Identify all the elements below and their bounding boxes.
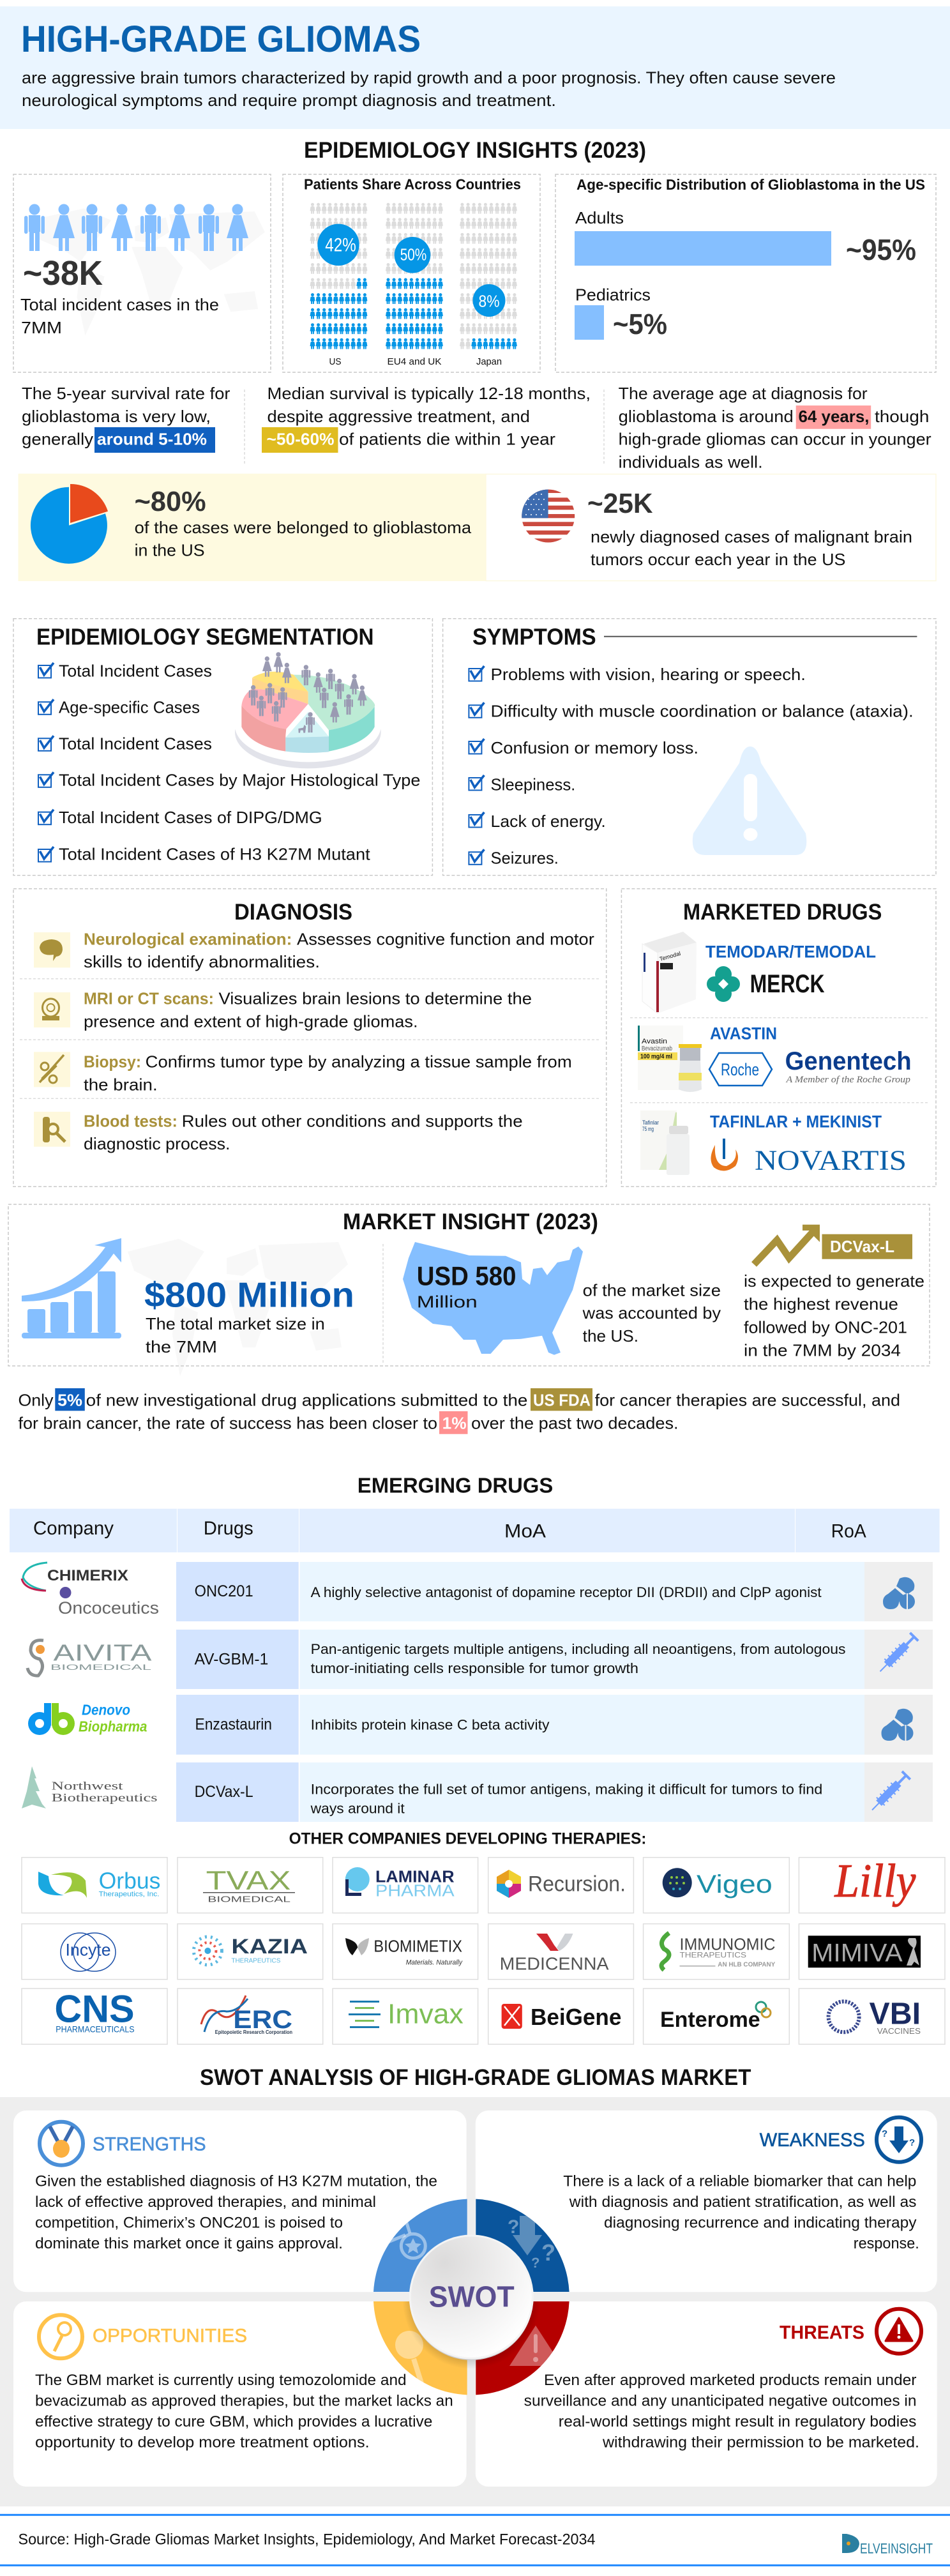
panel heading: Age-specific Distribution of Glioblastoma in the US: [577, 176, 925, 193]
pictogram: Japan: 8%: [479, 291, 499, 310]
logo: Orbus: Orbus: [99, 1867, 160, 1893]
table header: [10, 1509, 940, 1552]
logo: Aivita: [27, 1640, 152, 1676]
drug: Tafinlar + Mekinist: TAFINLAR + MEKINIST: [710, 1112, 882, 1132]
panel heading: EPIDEMIOLOGY SEGMENTATION: [36, 623, 374, 649]
checklist: symptoms: Lack of energy.: [490, 812, 606, 831]
logo: Kazia: [177, 1924, 323, 1980]
text block: DCVax-L revenue: in the 7MM by 2034: [744, 1340, 901, 1360]
weakness text: with diagnosis and patient stratification, as well as: [569, 2193, 917, 2211]
drug: Tafinlar + Mekinist: 75 mg: [642, 1126, 654, 1132]
logo grid: other companies: [22, 1855, 945, 2044]
item: blood tests: Rules out other conditions and supports the: [182, 1111, 523, 1130]
panel heading: MARKETED DRUGS: [683, 900, 882, 925]
checklist: symptoms: Difficulty with muscle coordination or balance (ataxia).: [490, 702, 914, 721]
bar: adults: [575, 208, 916, 266]
checklist: symptoms: Sleepiness.: [490, 775, 575, 794]
bar: pediatrics: [575, 285, 667, 340]
logo: Imvax: [333, 1989, 478, 2044]
row: Enzastaurin: Inhibits protein kinase C beta activity: [311, 1717, 549, 1733]
text block: median survival: [262, 384, 591, 453]
table header: RoA: [831, 1520, 866, 1542]
text block: DCVax-L revenue: followed by ONC-201: [744, 1317, 907, 1337]
text block: DCVax-L revenue: the highest revenue: [744, 1294, 898, 1314]
text block: FDA success rate: over the past two decades.: [471, 1413, 679, 1432]
stat: US share: [417, 1261, 721, 1345]
logo: Biomimetix: [333, 1924, 478, 1980]
row: DCVax-L: ways around it: [310, 1801, 405, 1816]
bar: adults: ~95%: [846, 233, 916, 266]
table header: Drugs: [204, 1518, 253, 1539]
pictogram: EU4 and UK: [386, 203, 443, 367]
item: MRI or CT scans: presence and extent of high-grade gliomas.: [84, 1012, 418, 1031]
logo: VBI Vaccines: VACCINES: [877, 2026, 921, 2036]
logo: Chimerix and Oncoceutics: [22, 1563, 159, 1618]
item: MRI or CT scans: MRI or CT scans:: [84, 989, 214, 1008]
stat: market size: the 7MM: [146, 1337, 217, 1356]
logo: Vigeo: [644, 1858, 789, 1913]
stat caption: [20, 295, 219, 337]
text block: median survival: ~50-60%: [267, 430, 335, 449]
logo: DelveInsight: [842, 2534, 933, 2556]
stat caption: Total incident cases in the: [20, 295, 219, 314]
text block: average age: [619, 384, 931, 472]
row: Enzastaurin: [28, 1695, 933, 1755]
logo: Vigeo: Vigeo: [697, 1870, 773, 1898]
logo: Mimiva: [799, 1924, 945, 1980]
text block: DCVax-L revenue: is expected to generate: [744, 1271, 924, 1291]
logo: Kazia: KAZIA: [231, 1935, 308, 1958]
SWOT wheel: ?: [541, 2239, 555, 2266]
drug: Temodar: TEMODAR/TEMODAL: [705, 942, 876, 961]
logo: TVAX: TVAX: [206, 1865, 290, 1895]
panel: marketed drugs: [621, 889, 936, 1186]
logo: Immunomic: THERAPEUTICS: [679, 1951, 746, 1960]
row: ONC201: [22, 1562, 933, 1621]
logo: Chimerix and Oncoceutics: Oncoceutics: [58, 1598, 159, 1618]
text block: median survival: of patients die within 1 year: [339, 430, 555, 449]
logo: Medicenna: MEDICENNA: [500, 1953, 609, 1973]
logo: Chimerix and Oncoceutics: CHIMERIX: [47, 1567, 128, 1584]
checklist: segments: Total Incident Cases of H3 K27M Mutant: [59, 845, 371, 864]
icon: magnifier: [39, 2315, 82, 2358]
panel heading: DIAGNOSIS: [234, 900, 352, 925]
panel: patients share across countries: [283, 174, 540, 372]
callout: 25K new cases: [486, 474, 936, 581]
stat: US share: of the market size: [583, 1280, 721, 1299]
text block: average age: 64 years,: [798, 407, 870, 426]
text block: average age: The average age at diagnosis for: [619, 384, 868, 403]
row: AV-GBM-1: AV-GBM-1: [195, 1650, 268, 1668]
text block: FDA success rate: [18, 1388, 900, 1434]
row: DCVax-L: [22, 1762, 933, 1822]
stat: market size: $800 Million: [144, 1275, 354, 1315]
opportunities text: opportunity to develop more treatment options.: [35, 2434, 370, 2451]
strengths text: dominate this market once it gains approval.: [35, 2235, 343, 2252]
panel: age-specific distribution: [555, 174, 936, 372]
card: opportunities: OPPORTUNITIES: [93, 2326, 247, 2347]
checklist: segments: Total Incident Cases of DIPG/DMG: [59, 808, 322, 827]
card: threats: THREATS: [780, 2322, 864, 2343]
checklist: segments: Total Incident Cases by Major Histological Type: [59, 771, 420, 790]
logo: Laminar Pharma: [333, 1858, 478, 1913]
bar: pediatrics: Pediatrics: [575, 285, 651, 304]
pictogram: EU4 and UK: EU4 and UK: [387, 356, 442, 367]
text block: average age: high-grade gliomas can occur in younger: [619, 430, 931, 449]
icon: warning triangle: [693, 746, 806, 855]
opportunities text: effective strategy to cure GBM, which provides a lucrative: [35, 2413, 432, 2430]
item: MRI or CT scans: [34, 989, 532, 1031]
weakness text: [563, 2172, 919, 2252]
logo: Immunomic: AN HLB COMPANY: [718, 1961, 776, 1968]
drug: Tafinlar + Mekinist: [640, 1110, 907, 1176]
icon: growth chart: [22, 1238, 121, 1338]
logo: CNS Pharmaceuticals: [22, 1988, 167, 2044]
text block: median survival: Median survival is typically 12-18 months,: [267, 384, 591, 403]
heading: SWOT analysis: SWOT ANALYSIS OF HIGH-GRADE GLIOMAS MARKET: [200, 2065, 751, 2090]
checklist: segments: [38, 661, 420, 864]
text block: average age: glioblastoma is around: [619, 407, 794, 426]
logo: Imvax: Imvax: [388, 1998, 464, 2029]
threats text: [524, 2372, 919, 2451]
panel: epidemiology segmentation: [13, 619, 432, 875]
weakness text: There is a lack of a reliable biomarker that can help: [563, 2172, 916, 2190]
weakness text: response.: [854, 2235, 919, 2252]
logo: Mimiva: MIMIVA: [811, 1939, 903, 1967]
panel heading: Patients Share Across Countries: [304, 176, 521, 193]
logo: ERC: [177, 1989, 323, 2044]
pictogram: US: US: [329, 356, 341, 367]
drug: Avastin: AVASTIN: [710, 1024, 777, 1043]
stat: market size: [144, 1275, 354, 1356]
intro text: neurological symptoms and require prompt diagnosis and treatment.: [22, 91, 556, 110]
threats text: surveillance and any unanticipated negative outcomes in: [524, 2393, 917, 2410]
weakness text: diagnosing recurrence and indicating therapy: [604, 2214, 917, 2231]
logo: Orbus: Therapeutics, Inc.: [99, 1890, 160, 1898]
logo: CNS Pharmaceuticals: PHARMACEUTICALS: [56, 2024, 135, 2034]
callout: 80 percent glioblastoma: of the cases were belonged to glioblastoma: [135, 518, 472, 537]
opportunities text: [35, 2372, 453, 2451]
drug: Temodar: [642, 932, 876, 1013]
logo: Merck: [707, 966, 825, 1002]
text block: FDA success rate: 1%: [442, 1413, 467, 1432]
icon: down arrow: ?: [909, 2137, 915, 2148]
stat: US share: was accounted by: [582, 1303, 721, 1322]
panel: symptoms: [443, 619, 936, 875]
logo: Lilly: Lilly: [834, 1855, 916, 1907]
logo: Denovo Biopharma: Biopharma: [79, 1718, 147, 1735]
logo: ERC: ERC: [233, 2006, 292, 2034]
panel heading: SYMPTOMS: [472, 623, 596, 649]
text block: average age: though: [875, 407, 929, 426]
logo: Northwest Biotherapeutics: Northwest: [52, 1779, 123, 1792]
row: DCVax-L: Incorporates the full set of tumor antigens, making it difficult for tumors to find: [311, 1781, 822, 1797]
item: neurological examination: skills to identify abnormalities.: [84, 952, 320, 971]
callout: 25K new cases: ~25K: [587, 488, 653, 519]
icon: warning: [877, 2309, 921, 2354]
logo: BeiGene: BeiGene: [531, 2004, 621, 2030]
row: ONC201: ONC201: [195, 1582, 253, 1600]
SWOT wheel: [373, 2199, 569, 2395]
logo: Northwest Biotherapeutics: Biotherapeutics: [52, 1791, 158, 1804]
callout: 25K new cases: tumors occur each year in the US: [591, 550, 845, 569]
drug: Tafinlar + Mekinist: Tafinlar: [642, 1119, 659, 1126]
pictogram: US: [310, 203, 367, 367]
stat: market size: The total market size in: [146, 1314, 325, 1333]
icon: down arrow: [877, 2118, 921, 2162]
table header: MoA: [504, 1520, 546, 1542]
text block: FDA success rate: US FDA: [533, 1391, 591, 1410]
item: blood tests: diagnostic process.: [84, 1134, 230, 1153]
icon: down arrow: ?: [882, 2128, 887, 2139]
logo: Immunomic: IMMUNOMIC: [679, 1934, 775, 1953]
panel: diagnosis: [13, 889, 607, 1186]
threats text: Even after approved marketed products remain under: [544, 2372, 917, 2389]
strengths text: lack of effective approved therapies, and minimal: [35, 2193, 376, 2211]
logo: Northwest Biotherapeutics: [22, 1766, 158, 1808]
logo: BeiGene: [488, 1989, 633, 2044]
drug: Avastin: Bevacizumab: [642, 1045, 672, 1052]
row: Enzastaurin: Enzastaurin: [195, 1716, 272, 1734]
heading: emerging drugs: EMERGING DRUGS: [358, 1473, 553, 1497]
text block: survival rate: around 5-10%: [97, 430, 207, 449]
header banner: [0, 6, 950, 129]
table header: Company: [33, 1518, 114, 1539]
logo: Merck: MERCK: [750, 970, 825, 998]
bar: adults: Adults: [575, 208, 624, 227]
logo: Aivita: AIVITA: [54, 1640, 152, 1666]
text block: median survival: despite aggressive treatment, and: [267, 407, 530, 426]
logo: Genentech: Genentech: [785, 1047, 912, 1075]
logo: Biomimetix: Materials. Naturally: [406, 1959, 463, 1967]
chart: pie: [31, 484, 108, 564]
SWOT wheel: ?: [531, 2255, 539, 2271]
callout: 80 percent glioblastoma: in the US: [135, 541, 205, 560]
card backgrounds: [13, 2110, 937, 2487]
checklist: symptoms: Problems with vision, hearing or speech.: [490, 665, 806, 684]
item: MRI or CT scans: Visualizes brain lesions to determine the: [218, 989, 532, 1008]
row: AV-GBM-1: Pan-antigenic targets multiple antigens, including all neoantigens, from autologous: [311, 1641, 845, 1657]
item: biopsy: Confirms tumor type by analyzing a tissue sample from: [146, 1052, 572, 1072]
logo: DelveInsight: ELVEINSIGHT: [860, 2540, 933, 2556]
logo: Aivita: BIOMEDICAL: [50, 1663, 152, 1672]
checklist: symptoms: Confusion or memory loss.: [490, 738, 698, 757]
checklist: segments: Total Incident Cases: [59, 661, 212, 680]
pictogram: EU4 and UK: 50%: [400, 245, 426, 264]
logo: Biomimetix: BIOMIMETIX: [373, 1937, 462, 1956]
card: strengths: [35, 2122, 437, 2252]
card: threats: [524, 2309, 921, 2451]
checklist: segments: Age-specific Cases: [59, 698, 200, 717]
panel: market insight: [8, 1204, 930, 1376]
drug: Avastin: Avastin: [642, 1038, 667, 1045]
logo: Novartis: NOVARTIS: [755, 1145, 907, 1176]
text block: FDA success rate: for cancer therapies are successful, and: [595, 1391, 900, 1410]
text block: FDA success rate: of new investigational drug applications submitted to the: [86, 1391, 527, 1410]
logo: Lilly: [799, 1855, 945, 1913]
intro text: [22, 68, 836, 110]
drug: Avastin: 100 mg/4 ml: [640, 1054, 672, 1060]
pictogram: US: 42%: [325, 234, 356, 255]
icon: DCVax-L trend: DCVax-L: [830, 1237, 894, 1256]
row: AV-GBM-1: [27, 1630, 933, 1689]
logo: Denovo Biopharma: Denovo: [82, 1702, 130, 1718]
callout: 25K new cases: newly diagnosed cases of malignant brain: [591, 527, 912, 546]
logo: Immunomic: [644, 1924, 789, 1980]
logo: Enterome: Enterome: [660, 2008, 760, 2032]
map: United States: [403, 1242, 583, 1355]
icon: DCVax-L trend: [754, 1225, 912, 1264]
logo: Recursion: Recursion.: [528, 1872, 626, 1897]
logo: Laminar Pharma: PHARMA: [375, 1881, 455, 1900]
text block: survival rate: generally: [22, 430, 93, 449]
panel: total incident cases: [13, 174, 271, 372]
threats text: real-world settings might result in regulatory bodies: [559, 2413, 917, 2430]
threats text: withdrawing their permission to be marketed.: [602, 2434, 919, 2451]
pictogram: Japan: Japan: [476, 356, 502, 367]
logo: Medicenna: [488, 1924, 633, 1980]
text block: DCVax-L revenue: [744, 1271, 924, 1360]
SWOT wheel: ?: [508, 2216, 519, 2238]
logo: Genentech: A Member of the Roche Group: [785, 1075, 911, 1085]
text block: average age: individuals as well.: [619, 453, 763, 472]
stat caption: 7MM: [21, 318, 62, 337]
text block: FDA success rate: Only: [18, 1391, 54, 1410]
text block: survival rate: The 5-year survival rate for: [22, 384, 230, 403]
checklist: symptoms: Seizures.: [490, 849, 559, 868]
logo: Roche: [709, 1053, 772, 1086]
logo: ERC: Epitopoietic Research Corporation: [215, 2029, 292, 2035]
item: neurological examination: Neurological examination:: [84, 929, 292, 948]
checklist: symptoms: [469, 665, 914, 868]
text block: FDA success rate: 5%: [57, 1391, 82, 1410]
icon: medal: [40, 2122, 83, 2165]
strengths text: Given the established diagnosis of H3 K27M mutation, the: [35, 2172, 437, 2190]
item: neurological examination: [34, 929, 594, 971]
item: biopsy: [34, 1052, 572, 1094]
item: biopsy: the brain.: [84, 1075, 158, 1094]
pictogram: Japan: [460, 203, 517, 367]
logo: Orbus: [22, 1858, 167, 1913]
stat: 38K: ~38K: [23, 254, 103, 292]
item: blood tests: [34, 1111, 523, 1153]
logo: Recursion: [488, 1858, 633, 1913]
logo: Incyte: Incyte: [65, 1940, 111, 1959]
SWOT section: [0, 2097, 950, 2506]
logo: TVAX: BIOMEDICAL: [207, 1894, 290, 1904]
text block: FDA success rate: for brain cancer, the rate of success has been closer to: [18, 1413, 437, 1432]
checklist: segments: Total Incident Cases: [59, 734, 212, 753]
strengths text: [35, 2172, 437, 2252]
logo: Enterome: [644, 1989, 789, 2044]
intro text: are aggressive brain tumors characterized by rapid growth and a poor prognosis. They often cause severe: [22, 68, 836, 87]
logo: VBI Vaccines: VBI: [870, 1997, 921, 2031]
stat: US share: Million: [417, 1292, 478, 1312]
opportunities text: bevacizumab as approved therapies, but the market lacks an: [35, 2393, 453, 2410]
drug: Avastin: [638, 1024, 912, 1092]
bar: pediatrics: ~5%: [613, 308, 667, 340]
logo: Laminar Pharma: LAMINAR: [375, 1867, 455, 1886]
heading: market insight: MARKET INSIGHT (2023): [343, 1209, 598, 1234]
icon: row of people: [24, 204, 248, 251]
table: emerging drugs: [10, 1509, 940, 1822]
item: blood tests: Blood tests:: [84, 1111, 177, 1130]
SWOT label: SWOT: [429, 2280, 515, 2314]
text block: survival rate: glioblastoma is very low,: [22, 407, 211, 426]
drug: Temodar: Temodal: [659, 950, 681, 962]
stat: US share: the US.: [583, 1326, 638, 1345]
row: AV-GBM-1: tumor-initiating cells responsible for tumor growth: [311, 1660, 638, 1676]
illustration: 3D population pie: [235, 652, 381, 768]
item: biopsy: Biopsy:: [84, 1052, 141, 1072]
logo: CNS Pharmaceuticals: CNS: [54, 1988, 135, 2031]
logo: Novartis: [711, 1139, 907, 1176]
footer: [0, 2514, 950, 2566]
title: HIGH-GRADE GLIOMAS: [21, 19, 421, 60]
row: DCVax-L: DCVax-L: [195, 1783, 253, 1801]
heading: epidemiology insights: EPIDEMIOLOGY INSIGHTS (2023): [304, 138, 646, 163]
row: ONC201: A highly selective antagonist of dopamine receptor DII (DRDII) and ClpP agonist: [311, 1584, 822, 1600]
heading: other companies: OTHER COMPANIES DEVELOPING THERAPIES:: [289, 1830, 646, 1847]
item: neurological examination: Assesses cognitive function and motor: [297, 929, 594, 948]
logo: TVAX: [177, 1858, 323, 1913]
card: weakness: WEAKNESS: [760, 2130, 865, 2151]
logo: Roche: Roche: [721, 1060, 759, 1079]
card: opportunities: [35, 2315, 453, 2451]
icon: US flag: [522, 489, 575, 543]
opportunities text: The GBM market is currently using temozolomide and: [35, 2372, 407, 2389]
logo: VBI Vaccines: [799, 1989, 945, 2044]
card: strengths: STRENGTHS: [93, 2134, 206, 2155]
logo: Denovo Biopharma: [28, 1702, 147, 1735]
logo: Incyte: [22, 1924, 167, 1980]
callout: 80 percent glioblastoma: ~80%: [135, 486, 206, 517]
card: weakness: [563, 2118, 921, 2252]
logo: Kazia: THERAPEUTICS: [231, 1957, 281, 1964]
text block: survival rate: [22, 384, 230, 453]
strengths text: competition, Chimerix’s ONC201 is poised to: [35, 2214, 343, 2231]
source text: Source: High-Grade Gliomas Market Insights, Epidemiology, And Market Forecast-2034: [18, 2531, 595, 2548]
stat: US share: USD 580: [417, 1261, 516, 1291]
callout: 80 percent glioblastoma: [18, 474, 486, 581]
